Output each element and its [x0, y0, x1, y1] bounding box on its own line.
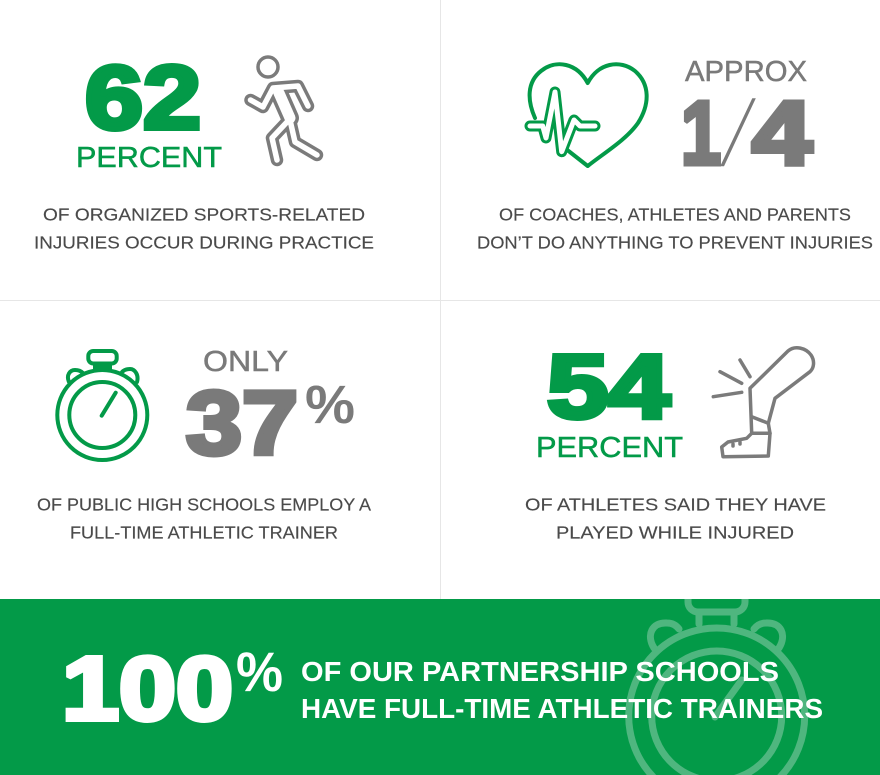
statistic: 100 percent: % [236, 640, 283, 703]
caption: OF COACHES, ATHLETES AND PARENTS [499, 204, 851, 224]
icon: heart with pulse [530, 64, 647, 166]
panel: 54 percent [525, 338, 826, 542]
caption: OF ORGANIZED SPORTS-RELATED [43, 204, 365, 224]
label: percent: PERCENT [76, 142, 222, 174]
banner text: HAVE FULL-TIME ATHLETIC TRAINERS [301, 693, 823, 724]
caption: OF PUBLIC HIGH SCHOOLS EMPLOY A [37, 494, 371, 514]
caption: FULL-TIME ATHLETIC TRAINER [70, 522, 338, 542]
caption [477, 204, 873, 252]
caption [34, 204, 374, 252]
statistic: 54: 54 [547, 338, 670, 438]
caption: DON’T DO ANYTHING TO PREVENT INJURIES [477, 232, 873, 252]
caption [525, 494, 826, 542]
label: only: ONLY [203, 346, 288, 378]
statistic: 37 percent: % [305, 375, 355, 435]
statistic: 37 percent [186, 374, 355, 474]
label: approx: APPROX [685, 56, 807, 88]
statistic: 1/4: 4 [752, 84, 812, 184]
caption: PLAYED WHILE INJURED [556, 522, 794, 542]
panel: 62 percent [34, 48, 374, 252]
caption: OF ATHLETES SAID THEY HAVE [525, 494, 826, 514]
icon: stopwatch [57, 351, 147, 460]
statistic: 1/4 [681, 78, 812, 190]
panel: green banner [0, 588, 880, 775]
icon: injured leg [713, 348, 814, 457]
panel: approx one quarter [477, 56, 873, 252]
banner text [301, 656, 823, 724]
caption: INJURIES OCCUR DURING PRACTICE [34, 232, 374, 252]
icon: ghost stopwatch [625, 599, 808, 775]
statistic: 100 percent: 100 [62, 640, 233, 740]
statistic: 62: 62 [85, 48, 201, 148]
statistic: 1/4: 1 [681, 84, 721, 184]
banner text: OF OUR PARTNERSHIP SCHOOLS [301, 656, 779, 687]
statistic: 1/4: / [714, 78, 762, 190]
panel: only 37 percent [37, 346, 371, 542]
banner background [0, 599, 880, 775]
icon: runner [250, 57, 317, 160]
label: percent: PERCENT [536, 432, 683, 464]
caption [37, 494, 371, 542]
statistic: 37 percent: 37 [186, 374, 298, 474]
statistic: 100 percent [62, 640, 283, 740]
